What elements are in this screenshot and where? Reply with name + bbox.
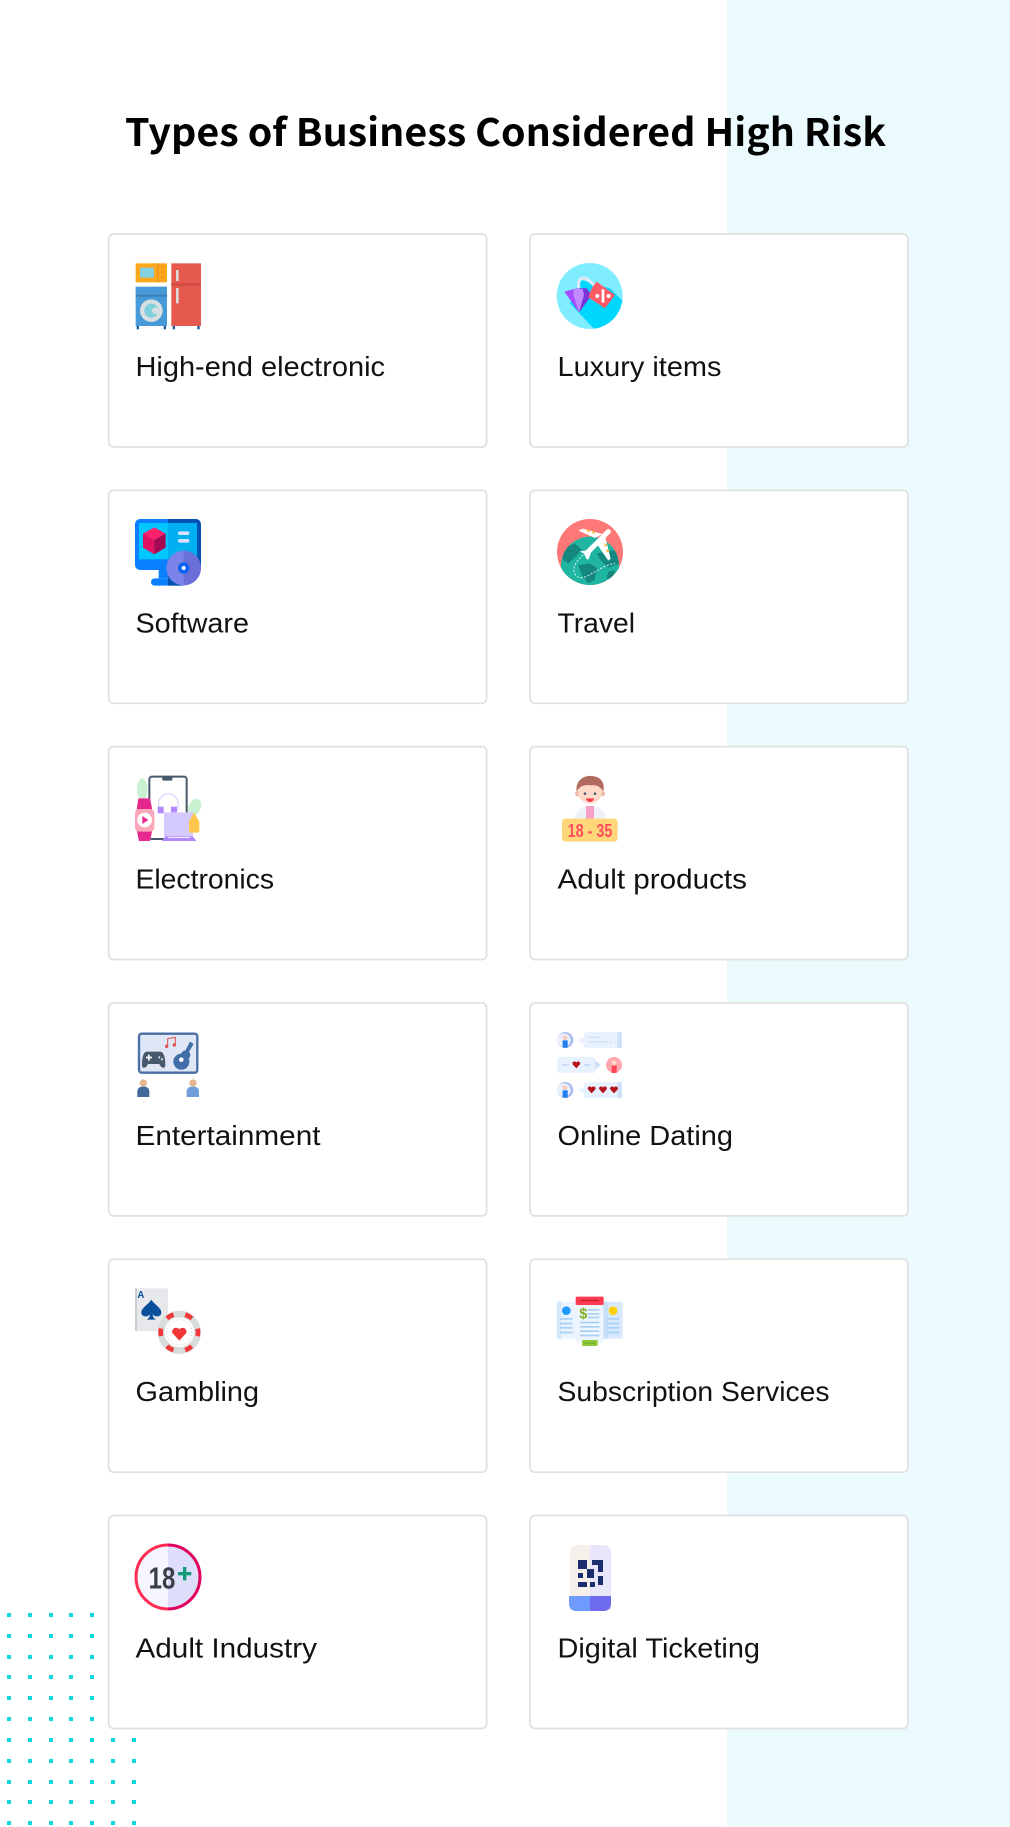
label: Entertainment <box>136 1120 321 1151</box>
icon: person with 18-35 plate <box>562 776 618 842</box>
panel: Digital Ticketing <box>530 1516 908 1728</box>
panel: Electronics <box>109 747 487 960</box>
icon: subscription plans: $ <box>579 1306 587 1322</box>
panel: Luxury items <box>530 234 908 447</box>
label: Adult Industry <box>136 1632 317 1664</box>
background panel: pale cyan band <box>727 0 1010 1827</box>
icon: phone, watch, headphones, laptop <box>135 777 204 841</box>
title: Types of Business Considered High Risk <box>125 102 886 157</box>
icon: playing card and poker chip: A <box>137 1290 144 1301</box>
panel: Online Dating <box>530 1003 908 1216</box>
label: Digital Ticketing <box>558 1632 760 1664</box>
panel: Travel <box>530 490 908 703</box>
icon: QR ticket <box>569 1545 611 1611</box>
icon: person with 18-35 plate: 18 - 35 <box>568 820 612 841</box>
label: Adult products <box>558 864 747 895</box>
label: Luxury items <box>558 351 722 382</box>
icon: entertainment screen <box>137 1034 199 1097</box>
icon: home appliances <box>136 263 201 329</box>
icon: diamond and price tag <box>556 263 623 329</box>
icon: playing card and poker chip <box>135 1288 201 1354</box>
label: Subscription Services <box>558 1376 830 1407</box>
label: Electronics <box>136 864 274 895</box>
panel: Gambling <box>109 1259 487 1472</box>
panel: Adult Industry <box>109 1516 487 1728</box>
icon: globe and plane <box>557 519 623 585</box>
panel: Subscription Services <box>530 1259 908 1472</box>
icon: monitor with disc <box>135 519 201 586</box>
panel: Software <box>109 490 487 703</box>
label: Travel <box>558 607 635 638</box>
panel: High-end electronic <box>109 234 487 447</box>
icon: 18+ badge: 18 <box>149 1561 175 1595</box>
label: Software <box>136 607 249 638</box>
icon: 18+ badge <box>136 1545 200 1609</box>
icon: dating chat bubbles <box>557 1032 622 1098</box>
label: High-end electronic <box>136 351 385 382</box>
label: Gambling <box>136 1376 259 1407</box>
panel: Entertainment <box>109 1003 487 1216</box>
icon: subscription plans <box>557 1297 623 1346</box>
label: Online Dating <box>558 1120 733 1151</box>
panel: Adult products <box>530 747 908 960</box>
decorative dot grid <box>7 1613 136 1825</box>
